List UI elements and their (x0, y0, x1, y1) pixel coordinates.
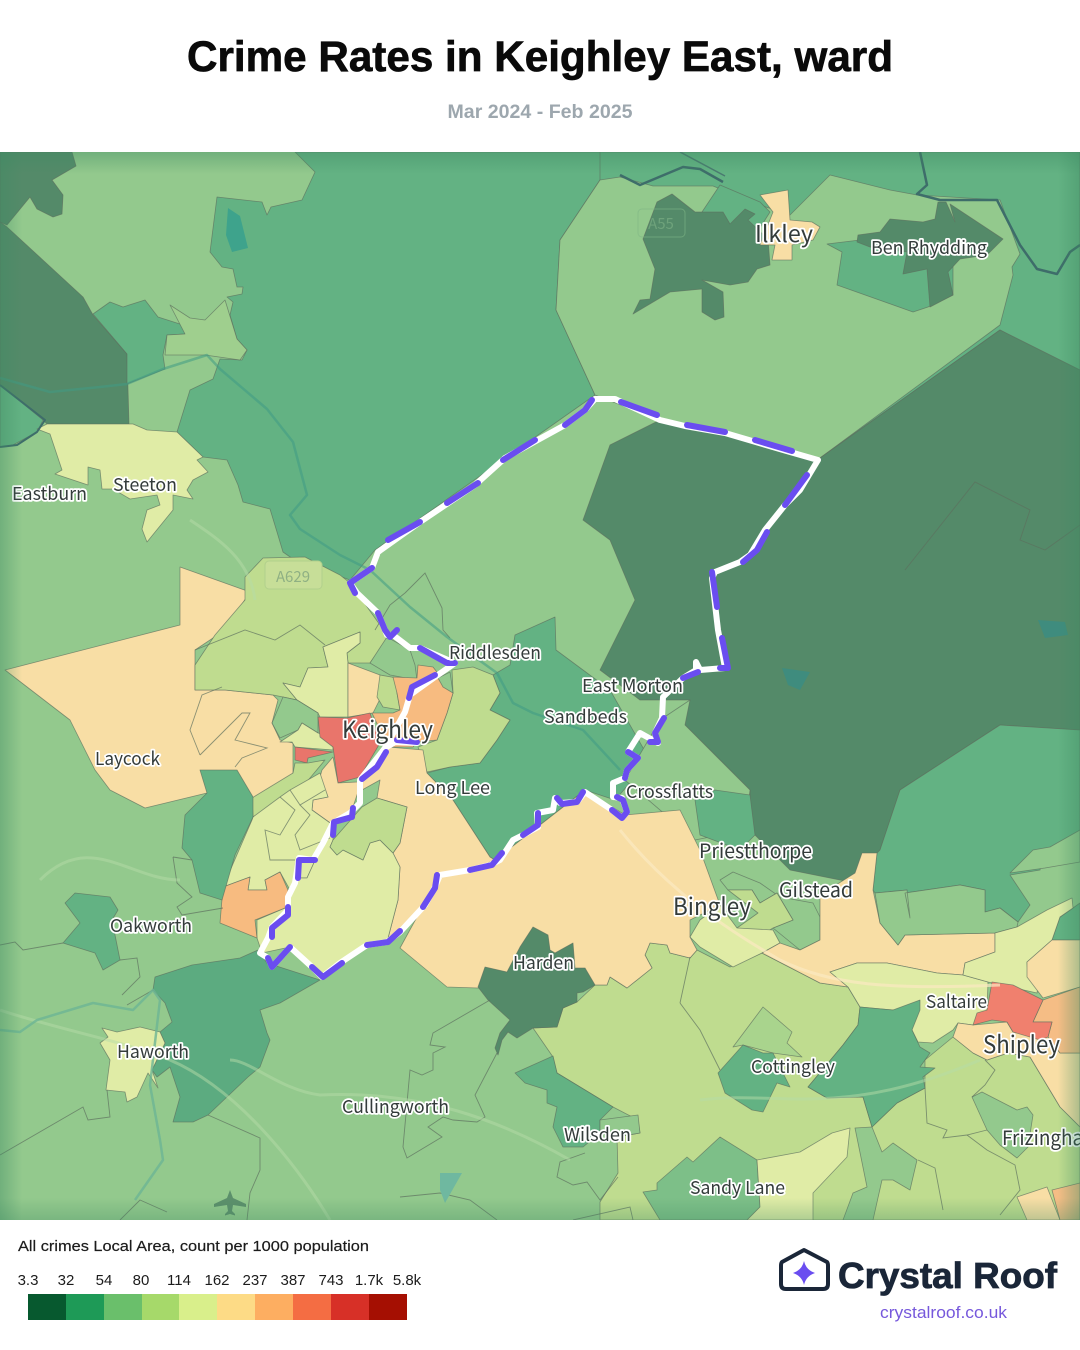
region: Shipley red (973, 982, 1052, 1040)
region: Haworth (100, 1027, 165, 1102)
region: north-west moorland (176, 152, 600, 580)
region: Keighley orange (372, 665, 453, 747)
region: pale strip (280, 723, 333, 750)
region: Keighley East tan (362, 747, 495, 942)
label: Crossflatts: Crossflatts (626, 778, 713, 804)
region: west dark block (0, 222, 129, 425)
region: south-west pale estates (223, 773, 333, 890)
legend scale labels: 114 (167, 1272, 191, 1289)
road on Bingley tan (620, 830, 1000, 987)
region: Crossflatts light green (625, 700, 750, 840)
label: Priestthorpe: Priestthorpe (699, 835, 812, 864)
label: Wilsden: Wilsden (564, 1121, 631, 1147)
region: Frizinghall light green (972, 1092, 1033, 1158)
region: Silsden mid green (93, 300, 185, 384)
label: Ben Rhydding: Ben Rhydding (871, 234, 987, 260)
region: Harden dark (478, 927, 595, 1055)
legend scale labels: 1.7k (355, 1272, 384, 1289)
region: south pale (747, 1128, 850, 1220)
spur white (385, 742, 417, 748)
region: north-east top strip (600, 152, 1080, 458)
region: small yellow green (377, 675, 400, 710)
region outlines (0, 482, 1080, 1220)
region: south-east mid green (873, 725, 1080, 922)
region: Priestthorpe green (695, 790, 755, 850)
region: south-east tan (1017, 1187, 1060, 1220)
region: Ben Rhydding (827, 240, 953, 312)
road shield A55: A55 (648, 213, 674, 234)
label: Haworth: Haworth (117, 1038, 189, 1064)
region: east mid edge (1052, 903, 1080, 940)
boundary white base (260, 399, 818, 977)
region: Gilstead light green (720, 872, 820, 950)
region: west Keighley green (272, 697, 318, 738)
region: yellow green strip (252, 760, 325, 817)
map edge vignette top (0, 152, 1080, 174)
region: Silsden village (165, 300, 247, 360)
label: Cottingley: Cottingley (751, 1053, 836, 1079)
region: Cottingley main (808, 1000, 935, 1127)
region: ward yellow green patch (330, 798, 407, 860)
region: Steeton (37, 424, 208, 542)
pond south (440, 1173, 462, 1203)
label: Sandy Lane: Sandy Lane (690, 1174, 785, 1200)
legend scale labels: 162 (204, 1272, 230, 1289)
region: south green strip (843, 1127, 917, 1220)
region: north Keighley yellow green (195, 557, 387, 700)
region: central valley green (427, 617, 650, 860)
region: Cottingley north light (733, 1007, 802, 1057)
region: Ilkley tan (760, 190, 820, 260)
icon: house with star (781, 1250, 828, 1289)
region: north Shipley pale (963, 898, 1073, 993)
label: Eastburn: Eastburn (12, 480, 87, 506)
region: Bingley pale (690, 905, 780, 967)
region: Ben Rhydding dark (857, 202, 1003, 307)
region: Keighley tan north (348, 663, 383, 717)
region: Keighley red west (295, 747, 333, 763)
legend title: All crimes Local Area, count per 1000 population (18, 1238, 369, 1255)
region: Gilstead yellow green (728, 890, 794, 930)
region: Shipley light green band (875, 885, 1018, 945)
road shield A629 (265, 561, 322, 589)
river Worth (0, 990, 163, 1200)
map edge vignette bottom (0, 1198, 1080, 1220)
region: Cottingley west (718, 1045, 790, 1112)
region: Sandy Lane (643, 1137, 760, 1220)
region: south of Oakworth green (152, 950, 320, 1122)
region: Shipley south tan (953, 1022, 1080, 1127)
label: Steeton: Steeton (113, 471, 177, 497)
label: Laycock: Laycock (95, 745, 160, 771)
region: south yellow green (533, 943, 1080, 1220)
map edge vignette left (0, 152, 22, 1220)
region: Baildon light (1010, 830, 1080, 873)
region: Saltaire pale (830, 963, 988, 1043)
region: central pale (283, 632, 360, 717)
label: Long Lee: Long Lee (415, 774, 490, 800)
region: Wilsden east light (600, 1115, 640, 1137)
legend scale labels (18, 1272, 422, 1289)
label: Shipley: Shipley (983, 1025, 1060, 1060)
region: Wilsden (515, 1056, 613, 1147)
label: Oakworth: Oakworth (110, 912, 192, 938)
legend scale labels: 237 (242, 1272, 268, 1289)
region: Laycock tan (5, 567, 293, 808)
region: east Shipley tan (1027, 940, 1080, 998)
boundary purple dashes (268, 400, 807, 977)
label: Cullingworth: Cullingworth (342, 1093, 449, 1119)
logo: Crystal Roof (781, 1250, 1058, 1322)
region: Long Lee yellow green (418, 667, 510, 772)
roads (0, 520, 980, 1220)
label: Gilstead: Gilstead (779, 874, 853, 903)
label: Riddlesden: Riddlesden (449, 639, 541, 665)
place labels (12, 215, 1080, 1200)
region: Bingley tan (400, 790, 720, 988)
choropleth map (0, 152, 1080, 1220)
region: ward south pale (257, 825, 400, 977)
legend scale labels: 54 (96, 1272, 112, 1289)
region: tan east band (762, 853, 995, 987)
legend scale labels: 3.3 (18, 1272, 38, 1289)
region: north-east upland (556, 175, 1020, 458)
map edge vignette right (1058, 152, 1080, 1220)
legend scale labels: 5.8k (393, 1272, 422, 1289)
region: south-east orange (1052, 1183, 1080, 1220)
region: south Keighley tan (312, 757, 362, 825)
lake (1038, 620, 1068, 638)
website link: crystalroof.co.uk (880, 1303, 1008, 1322)
airplane icon (214, 1190, 246, 1216)
region: Keighley orange south-west (220, 872, 288, 938)
label: Bingley: Bingley (673, 887, 751, 922)
region: east moor dark (583, 330, 1080, 882)
road shield A629: A629 (276, 566, 310, 587)
subtitle: date range: Mar 2024 - Feb 2025 (448, 102, 633, 123)
lake small (782, 668, 810, 690)
river north-east (917, 152, 1080, 274)
region: Oakworth green (63, 893, 120, 970)
label: Keighley: Keighley (342, 710, 433, 745)
label: East Morton: East Morton (582, 672, 683, 698)
river Ilkley (620, 167, 723, 185)
legend scale labels: 80 (133, 1272, 149, 1289)
region: small green east (438, 672, 453, 693)
label: Ilkley: Ilkley (755, 215, 813, 249)
legend scale labels: 743 (318, 1272, 344, 1289)
label: Harden: Harden (513, 949, 574, 975)
region: Keighley red centre (318, 713, 380, 783)
legend (18, 1238, 422, 1320)
title: Crime Rates in Keighley East, ward (187, 33, 893, 81)
region: west mid green (0, 385, 43, 447)
logo wordmark: Crystal Roof (838, 1255, 1058, 1296)
label: Sandbeds: Sandbeds (544, 703, 627, 729)
legend scale labels: 32 (58, 1272, 74, 1289)
lake north-west (226, 208, 248, 252)
region: north-west corner dark (0, 152, 76, 225)
label: Saltaire: Saltaire (926, 988, 987, 1014)
region: west mid green (182, 770, 253, 900)
legend colour bar (28, 1294, 407, 1320)
legend scale labels: 387 (280, 1272, 306, 1289)
region: Ilkley mid green (702, 184, 770, 227)
river Aire (0, 355, 620, 770)
region: Ilkley dark (633, 194, 770, 320)
region: Shipley orange (1033, 987, 1080, 1053)
river left edge (0, 385, 45, 447)
region: Riddlesden light green (370, 637, 417, 680)
ward boundary: Keighley East (260, 399, 818, 977)
river top (680, 152, 725, 176)
road shield A55 (638, 209, 685, 237)
